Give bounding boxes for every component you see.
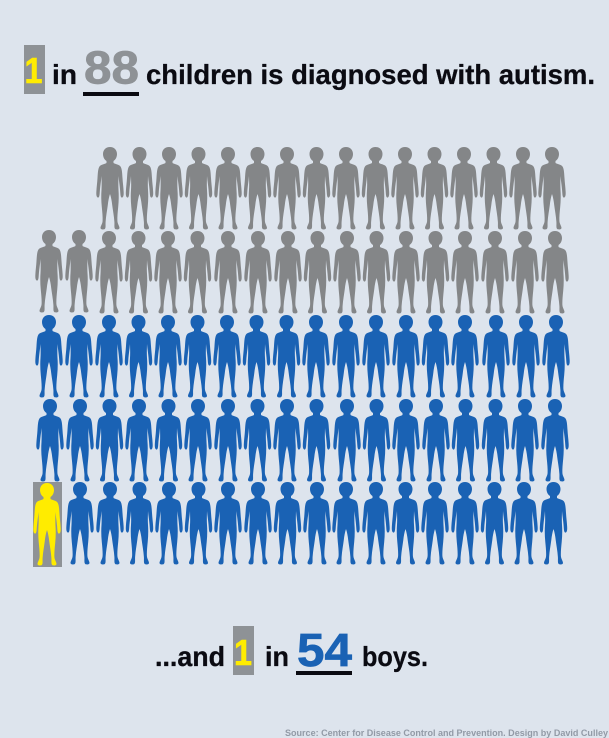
- row 4: blue figures: [36, 399, 569, 481]
- closing line: and 1 in 54 boys: [155, 624, 428, 676]
- title: 1 in 88 children is diagnosed with autism: [24, 42, 595, 96]
- highlighted numeral 1: 1: [24, 50, 42, 91]
- words: ...and: ...and: [155, 641, 225, 672]
- highlighted numeral 1: 1: [234, 632, 252, 673]
- word: in: in: [52, 59, 77, 90]
- highlighted yellow figure: [33, 482, 62, 567]
- number 54 with underline: 54: [297, 624, 352, 676]
- row 5: blue figures: [66, 482, 567, 564]
- number 88 with underline: 88: [84, 42, 139, 94]
- row 1: grey figures: [96, 147, 566, 229]
- words: children is diagnosed with autism: children is diagnosed with autism.: [146, 59, 595, 90]
- row 2: grey figures: [35, 230, 569, 313]
- word: boys: boys.: [362, 641, 428, 672]
- word: in: in: [265, 641, 289, 672]
- row 3: blue figures: [35, 315, 570, 397]
